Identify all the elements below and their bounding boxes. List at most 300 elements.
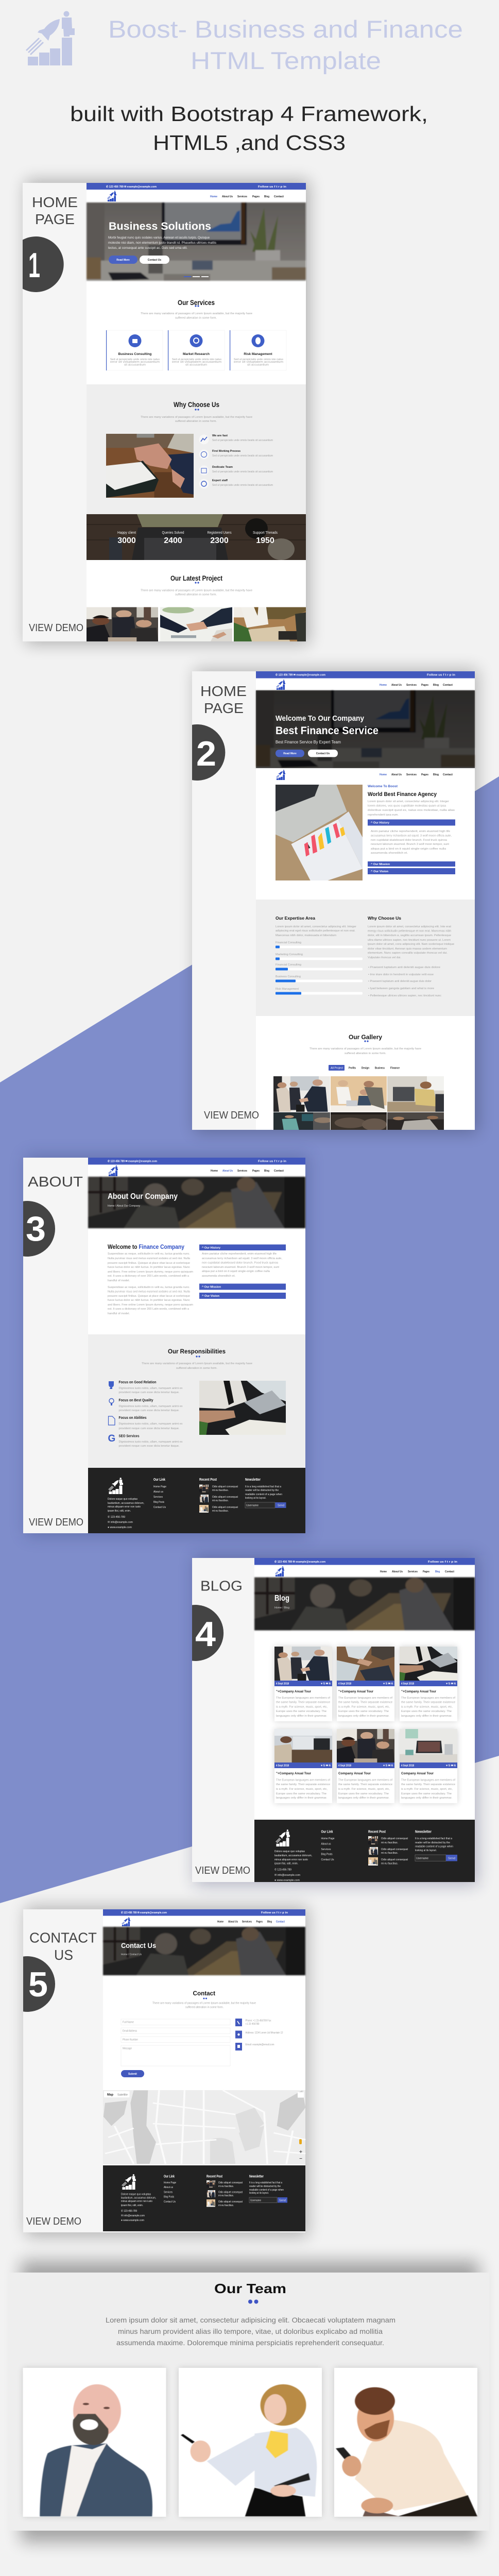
sticky nav: About Us (391, 773, 402, 776)
footer: Username (250, 2199, 261, 2202)
nav bar: Home (210, 195, 217, 198)
section: why choose us: Why Choose Us (174, 400, 219, 409)
footer: Services (321, 1848, 331, 1851)
footer: Dolore eaque quo voluptas (108, 1498, 137, 1501)
blog card 4: the same family. Their separate existence (276, 1783, 330, 1786)
top bar (254, 1558, 475, 1565)
nav bar: Home (217, 1921, 223, 1924)
contact form: Email Address (123, 2030, 137, 2033)
view demo label: VIEW DEMO (204, 1110, 259, 1121)
accordion: non cupidatat skateboard dolor brunch. Food truck quinoa (202, 1261, 278, 1264)
responsibility list: SEO Services (118, 1434, 140, 1438)
sticky nav (256, 768, 475, 782)
blog card 1: the same family. Their separate existence (276, 1701, 330, 1704)
panel: contact us (23, 1909, 305, 2232)
nav bar: Home (211, 1170, 218, 1173)
contact heading: There are many variations of passages of Lorem Ipsum available, but the majority have (152, 2002, 256, 2005)
accordion (368, 819, 455, 874)
blog card 3: 4 Sept 2018 (401, 1683, 414, 1686)
nav bar: About Us (222, 1170, 233, 1173)
number badge 3: 3 (26, 1209, 46, 1248)
accordion: assumenda shoreditch et. (202, 1275, 235, 1278)
service card: market research: Sed ut perspiciatis unde omnis iste natus (172, 358, 222, 361)
skill bars (276, 941, 363, 994)
top bar: ✆ 123 456 789 ✉ example@example.com (274, 1560, 325, 1564)
hero: best finance service: Best Finance Service By Expert Team (276, 740, 341, 744)
service card: risk management: sit accusantium (247, 364, 269, 367)
footer: laudantium, accusamus dolorum, (121, 2197, 156, 2200)
accordion: Anim pariatur cliche reprehenderit, enim eiusmod high life (202, 1252, 277, 1256)
why choose text: • Iyad between gangsta gabilam and what is more (368, 987, 434, 990)
top bar: ✆ 123 456 789 ✉ example@example.com (106, 185, 157, 189)
hero: contact us (103, 1927, 305, 1975)
hero: about our company: Home / About Our Company (108, 1205, 140, 1208)
footer: readable content of a page when (415, 1845, 453, 1849)
side label: home page: HOME (32, 194, 78, 210)
footer: looking at its layout. (415, 1849, 437, 1852)
sticky nav: Home (380, 773, 387, 776)
map controls: − (299, 2156, 302, 2162)
blog card 6: languages only differ in their grammar. (401, 1797, 452, 1800)
number badge 5: 5 (28, 1965, 48, 2004)
section: why choose us: suffered alteration in some form. (175, 420, 217, 423)
number badge 4: 4 (195, 1615, 216, 1654)
footer: Home Page (164, 2181, 176, 2184)
footer (254, 1820, 475, 1882)
service card: market research: Market Research (183, 352, 210, 356)
nav bar: About Us (391, 684, 402, 687)
welcome text: Suspendisse ac neque, sollicitudin in velit eu, luctus gravida nunc. (108, 1252, 190, 1256)
number badge 4 (192, 1605, 223, 1661)
view demo label: VIEW DEMO (29, 1517, 83, 1528)
footer: About us (321, 1842, 331, 1845)
blog card 5: the same family. Their separate existence (338, 1783, 392, 1786)
nav bar (108, 1165, 284, 1176)
section: expertise and why choose us: Why Choose Us (368, 916, 401, 921)
buttons: Read More (116, 259, 130, 262)
blog card 3: is a myth. For science, music, sport, etc, (401, 1705, 453, 1708)
panel: our team (8, 2273, 489, 2531)
subtitle (70, 102, 428, 155)
nav bar: Services (406, 684, 417, 687)
responsibility list: Focus on Abilities (118, 1416, 147, 1420)
section: expertise and why choose us: Our Expertise Area (276, 916, 315, 921)
responsibility list (108, 1381, 183, 1448)
buttons: Contact Us (148, 259, 161, 262)
service card: business consulting: error sit voluptatem accusantium (110, 361, 160, 364)
hero: best finance service (256, 690, 475, 768)
footer: mi eu faucibus. (381, 1841, 398, 1844)
top bar: ✆ 123 456 789 ✉ example@example.com (121, 1911, 167, 1914)
nav bar: Blog (264, 1170, 269, 1173)
nav bar: Pages (256, 1921, 263, 1924)
number badge 3 (23, 1201, 55, 1257)
top bar: ✆ 123 456 789 ✉ example@example.com (108, 1159, 157, 1163)
subtitle: HTML5 ,and CSS3 (153, 131, 346, 155)
number badge 2: 2 (196, 734, 216, 773)
top bar (103, 1909, 305, 1916)
footer: mi eu faucibus. (381, 1862, 398, 1865)
footer: Odio aliquet consequat (218, 2181, 243, 2184)
stats band: 3000 (117, 536, 136, 545)
nav bar: About Us (392, 1570, 403, 1573)
hero: contact us: Home / Contact Us (121, 1953, 142, 1956)
footer: ✉ info@example.com (274, 1874, 300, 1877)
blog card 1: is a myth. For science, music, sport, etc, (276, 1705, 328, 1708)
top bar (256, 671, 475, 678)
footer: Dolore eaque quo voluptas (121, 2193, 151, 2196)
about text: World Best Finance Agency (368, 791, 437, 798)
contact details: +1 23 456789 (245, 2023, 260, 2026)
welcome text: Nulla purvinar risus sed metus euismod sodales ut sed nisi. Nulla (108, 1257, 190, 1260)
blog card 1: The European languages are members of (276, 1697, 331, 1700)
why choose text: Lorem ipsum dolor sit amet, consectetur adipiscing elit. Inte erat (368, 925, 452, 928)
service card: business consulting: Sed ut perspiciatis unde omnis iste natus (110, 358, 160, 361)
responsibility list: Focus on Best Quality (118, 1399, 153, 1402)
team intro text: minus harum provident alias illo tempore, vitae, ut doloribus explicabo ad mollitia (118, 2327, 383, 2335)
heading: our team: Our Team (214, 2281, 286, 2296)
footer: Odio aliquet consequat (212, 1506, 238, 1509)
footer: Newsletter (415, 1830, 432, 1834)
feature list (199, 434, 273, 488)
why choose text: elementum. Nunc sapien convallis vulputate rhoncus vel dui. (368, 952, 448, 955)
skill bars: Financial Consulting (276, 941, 301, 944)
gallery filter tabs: Business (375, 1066, 385, 1070)
nav bar: Services (237, 195, 247, 198)
footer: Contact Us (321, 1858, 334, 1861)
panel: home page 2 (192, 671, 475, 1131)
nav bar: Blog (435, 1570, 440, 1573)
blog card 4: "+Company Anual Tour (276, 1772, 311, 1775)
nav bar: About Us (222, 195, 233, 198)
service card: risk management (230, 330, 286, 370)
top bar (88, 1158, 305, 1164)
welcome text (108, 1243, 193, 1315)
blog card 4: 4 Sept 2018 (276, 1764, 289, 1767)
contact form: Phone Number (123, 2038, 138, 2041)
contact form: Submit (128, 2073, 137, 2076)
nav bar: Home (380, 684, 387, 687)
footer (88, 1468, 305, 1533)
service card: market research (168, 330, 225, 370)
footer: Contact Us (164, 2200, 176, 2204)
blog card 2: ♥ 5 ✉ 6 (383, 1683, 393, 1686)
welcome text: fusce luctus dolor ac nibh luctus. In porttitor lacus egestas. Nunc (108, 1266, 191, 1269)
accordion: ^ Our History (371, 821, 390, 824)
responsibility list: Dignissimos iusto nobis, ullam, numquam animi ex (118, 1440, 183, 1444)
about text: Welcome To Boost (368, 785, 398, 788)
blog card 5: Europe uses the same vocabulary. The (338, 1792, 389, 1795)
footer: readable content of a page when (245, 1493, 282, 1496)
section: our latest project: There are many variations of passages of Lorem Ipsum available, but the majority have (141, 589, 252, 592)
service card: risk management: error sit voluptatem accusantium (234, 361, 283, 364)
blog card 4 (274, 1729, 332, 1803)
footer: minus aliquam error non iusto (121, 2200, 152, 2203)
nav bar: Pages (252, 195, 260, 198)
footer (103, 2165, 305, 2231)
hero: best finance service: Welcome To Our Company (276, 714, 365, 723)
title (108, 15, 463, 74)
blog card 3: languages only differ in their grammar. (401, 1715, 452, 1718)
welcome text: est. It uses a dictionary of over 200 Latin words, combined with a (108, 1308, 189, 1311)
gallery filter tabs: All Project (331, 1066, 343, 1070)
blog card 2: Europe uses the same vocabulary. The (338, 1710, 389, 1713)
footer: Our Link (153, 1478, 165, 1482)
responsibility list: provident neque cum esse dicta tenetur itaque. (118, 1445, 179, 1448)
sticky nav: Services (406, 773, 417, 776)
footer: ✉ info@example.com (108, 1521, 133, 1524)
stats band: Queries Solved (162, 531, 184, 535)
blog card 6: ♥ 5 ✉ 6 (446, 1764, 456, 1767)
section: our responsibilities (88, 1334, 305, 1468)
why choose text: Vulputate rhoncus vel dui. (368, 956, 401, 959)
hero: blog: Blog (274, 1594, 289, 1603)
footer: It is a long established fact that a (245, 1485, 282, 1488)
footer: laudantium, accusamus dolorum, (108, 1502, 144, 1505)
section: expertise and why choose us: Maecenas nibh dolor, malesuada et bibendum (276, 934, 336, 937)
side label: home page: PAGE (204, 700, 244, 716)
welcome text: fusce luctus dolor ac nibh luctus. In porttitor lacus egestas. Nunc (108, 1299, 191, 1302)
nav bar (87, 190, 306, 202)
stats band: Support Threads (253, 531, 278, 535)
skill bars: Financial Consulting (276, 963, 301, 967)
gallery photos (273, 1076, 444, 1131)
welcome text: Suspendisse ac neque, sollicitudin in velit eu, luctus gravida nunc. (108, 1286, 190, 1289)
side label: home page: HOME (200, 683, 247, 699)
nav bar: Home (380, 1570, 387, 1573)
footer: Blog Posts (153, 1501, 164, 1504)
hero: business solutions (87, 202, 306, 281)
accordion: accusamus terry richardson ad squid. 3 wolf moon officia aute, (371, 835, 452, 838)
accordion: assumenda shoreditch et. (371, 852, 408, 855)
footer: Home Page (321, 1837, 335, 1840)
blog card 4: The European languages are members of (276, 1778, 331, 1782)
photo: laptop meeting (199, 1381, 286, 1435)
accordion: nesciunt laborum eiusmod. Brunch 3 wolf moon tempor, sunt (202, 1266, 280, 1269)
title: HTML Template (191, 47, 381, 74)
blog card 5: 4 Sept 2018 (338, 1764, 351, 1767)
feature list: First Working Process (212, 450, 240, 453)
icon: boost logo (26, 11, 75, 65)
service card: market research: error sit voluptatem accusantium (172, 361, 221, 364)
side label: blog: BLOG (200, 1578, 243, 1594)
blog card 5 (337, 1729, 394, 1803)
footer: About us (153, 1490, 163, 1494)
about text: Lorem ipsum dolor sit amet, consectetur adipiscing elit. Integer (368, 800, 449, 803)
gallery filter tabs: Profits (349, 1066, 356, 1070)
blog card 5: languages only differ in their grammar. (338, 1797, 389, 1800)
blog card 1: "+Company Anual Tour (276, 1690, 311, 1693)
feature list: We are fast (212, 434, 228, 437)
subtitle: built with Bootstrap 4 Framework, (70, 102, 428, 126)
buttons (109, 256, 169, 264)
stats band: 1950 (256, 536, 274, 545)
footer: reader will be distracted by the (415, 1841, 450, 1844)
blog card 2: "+Company Anual Tour (338, 1690, 373, 1693)
footer: ipsam fiisi, odit, enim. (108, 1510, 131, 1513)
hero: contact us: Contact Us (121, 1941, 156, 1950)
skill bars: Risk Management (276, 988, 299, 991)
footer: mi eu faucibus. (381, 1852, 398, 1855)
responsibility list: provident neque cum esse dicta tenetur itaque. (118, 1427, 179, 1430)
side label: about: ABOUT (28, 1174, 83, 1190)
service card: business consulting: Business Consulting (118, 352, 151, 356)
hero: best finance service: Best Finance Service (276, 725, 378, 737)
accordion: non cupidatat skateboard dolor brunch. Food truck quinoa (371, 839, 447, 842)
hero: business solutions: molestie nisi diam, non elementum justo blandit id. Phasellus ultrices mattis (108, 242, 216, 245)
section: our gallery: Our Gallery (349, 1033, 382, 1041)
section: our gallery (273, 1033, 444, 1131)
nav bar: About Us (228, 1921, 238, 1924)
footer: Odio aliquet consequat (218, 2200, 243, 2204)
hero: best finance service: Read More (283, 752, 297, 755)
blog card 4: ♥ 5 ✉ 6 (321, 1764, 331, 1767)
hero: blog (254, 1578, 475, 1630)
footer: Odio aliquet consequat (212, 1485, 238, 1488)
welcome text: posuere suscipit finibus. Quisque at place vitae lacus ut scelerisque (108, 1295, 190, 1298)
footer: Odio aliquet consequat (212, 1496, 238, 1499)
footer: Recent Post (207, 2175, 223, 2178)
section: our latest project: suffered alteration in some form. (175, 594, 217, 597)
footer: About us (164, 2186, 173, 2189)
feature list: Dedicate Team (212, 466, 233, 469)
purple diagonal background band (0, 776, 499, 1903)
footer: Contact Us (153, 1506, 166, 1509)
footer: looking at its layout. (245, 1497, 266, 1500)
footer: reader will be distracted by the (245, 1489, 279, 1492)
blog card 3: the same family. Their separate existence (401, 1701, 455, 1704)
hero: best finance service: Contact Us (316, 752, 330, 755)
nav bar: Blog (433, 684, 439, 687)
service card: market research: sit accusantium (185, 364, 207, 367)
welcome text: handful of model. (108, 1312, 130, 1315)
section: our latest project: Our Latest Project (170, 574, 222, 582)
footer: Services (153, 1496, 163, 1499)
service card: business consulting: sit accusantium (124, 364, 146, 367)
accordion: ^ Our Mission (371, 863, 390, 866)
welcome text: and libero. Free online Lorem Ipsum dummy, neque porro quisquam (108, 1303, 193, 1307)
blog card 2: is a myth. For science, music, sport, etc, (338, 1705, 390, 1708)
hero: about our company: About Our Company (108, 1192, 178, 1201)
footer: Our Link (321, 1830, 333, 1834)
contact form (121, 2019, 230, 2077)
blog card 6: Europe uses the same vocabulary. The (401, 1792, 452, 1795)
skill bars: Business Consulting (276, 975, 301, 978)
accordion: accusamus terry richardson ad squid. 3 wolf moon officia aute, (202, 1257, 282, 1260)
footer: mi eu faucibus. (212, 1489, 229, 1492)
nav bar: Pages (421, 684, 428, 687)
accordion: ^ Our Vision (202, 1295, 220, 1298)
service card: risk management: Risk Management (244, 352, 272, 356)
nav bar (276, 680, 453, 690)
stats band: Registered Users (207, 531, 232, 535)
nav bar: Pages (252, 1170, 260, 1173)
footer: ✆ 123-456-789 (274, 1868, 291, 1871)
top bar: Follow us f t r p in (261, 1911, 288, 1914)
why choose text: ultra diame ultrices sapien, nec tincidunt nunc posuere ut. Lorem (368, 939, 451, 942)
section: why choose us (87, 384, 306, 514)
accordion: aliqua put a bird on it squid single-origin coffee nulla (371, 848, 446, 851)
footer: minus aliquam error non iusto (274, 1858, 308, 1861)
welcome text: est. It uses a dictionary of over 200 Latin words, combined with a (108, 1275, 189, 1278)
footer: Blog Posts (321, 1853, 333, 1856)
top bar (87, 183, 306, 190)
footer: laudantium, accusamus dolorum, (274, 1854, 312, 1857)
responsibility list: Focus on Good Relation (118, 1381, 157, 1384)
service card: risk management: Sed ut perspiciatis unde omnis iste natus (234, 358, 284, 361)
blog card 5: ♥ 5 ✉ 6 (383, 1764, 393, 1767)
accordion: ^ Our Mission (202, 1286, 221, 1289)
responsibility list: provident neque cum esse dicta tenetur itaque. (118, 1391, 179, 1394)
footer: mi eu faucibus. (218, 2204, 234, 2207)
blog card 3: Europe uses the same vocabulary. The (401, 1710, 452, 1713)
team intro text (106, 2316, 395, 2347)
footer: Our Link (164, 2175, 175, 2178)
footer: mi eu faucibus. (212, 1499, 229, 1502)
footer: ipsam fiisi, odit, enim. (121, 2204, 143, 2207)
contact details: Email: example@email.com (245, 2043, 274, 2046)
nav bar: Contact (274, 1170, 284, 1173)
blog card 1: ♥ 5 ✉ 6 (321, 1683, 331, 1686)
why choose text: • Praesent tuptatum anti deleniti augue duis dolore (368, 966, 440, 969)
blog card 1: 4 Sept 2018 (276, 1683, 289, 1686)
footer: Odio aliquet consequat (218, 2191, 243, 2194)
section: our gallery: suffered alteration in some form. (345, 1052, 386, 1055)
footer: ● www.example.com (108, 1526, 132, 1529)
footer: ✉ info@example.com (121, 2214, 145, 2217)
panel: about (23, 1158, 305, 1533)
why choose text: energy risus sollicitudin pellentesque et non erat. Maecenas nibh (368, 930, 451, 933)
blog card 5: The European languages are members of (338, 1778, 393, 1782)
feature list: Sed ut perspiciatis unde omnis beatis sit accusantium (212, 439, 273, 442)
section: our services: suffered alteration in some form. (175, 316, 217, 319)
why choose text: • Imo iriure dolor in hendrerit in vulputate velit esse (368, 973, 434, 976)
why choose text: • Praesent tuptatum anti deleniti augue duis dolor (368, 980, 432, 983)
hero: business solutions: Business Solutions (109, 221, 211, 232)
accordion: ^ Our History (202, 1247, 221, 1250)
view demo label: VIEW DEMO (195, 1865, 250, 1876)
footer: Send (278, 1504, 284, 1507)
blog card 6: Company Anual Tour (401, 1772, 434, 1775)
number badge 1: 1 (28, 246, 40, 285)
contact heading: suffered alteration in some form. (185, 2006, 223, 2009)
top bar: Follow us f t r p in (427, 674, 456, 677)
footer: reader will be distracted by the (249, 2185, 281, 2188)
why choose text (368, 925, 454, 997)
nav bar: Services (408, 1570, 418, 1573)
nav bar: Services (242, 1921, 252, 1924)
responsibility list: provident neque cum esse dicta tenetur itaque. (118, 1409, 179, 1412)
blog card 2: 4 Sept 2018 (338, 1683, 351, 1686)
footer: looking at its layout. (249, 2192, 269, 2195)
about text: doloribus suscipit quod ex, natus eos molestiae, nulla alias (368, 809, 455, 812)
why choose text: • Pellentesque ultrices ultrices sapien, nec tincidunt nunc (368, 994, 442, 997)
gallery filter tabs: Design (362, 1066, 370, 1070)
section: our responsibilities: suffered alteration in some form. (176, 1367, 217, 1370)
number badge 5 (23, 1956, 55, 2012)
blog card 2: the same family. Their separate existence (338, 1701, 392, 1704)
blog card 6: The European languages are members of (401, 1778, 456, 1782)
blog card 5: Company Anual Tour (338, 1772, 371, 1775)
responsibility list: G (108, 1433, 115, 1444)
responsibility list: Dignissimos iusto nobis, ullam, numquam animi ex (118, 1405, 183, 1408)
section: expertise and why choose us: adipiscing erat eget risus sollicitudin pellentesque et non erat. (276, 929, 355, 933)
feature list: Sed ut perspiciatis unde omnis beatis sit accusantium (212, 454, 273, 457)
panel: home page 1 (23, 183, 306, 641)
section: our services (106, 298, 286, 370)
contact form: Full Name (123, 2021, 134, 2024)
footer: Recent Post (368, 1830, 386, 1834)
